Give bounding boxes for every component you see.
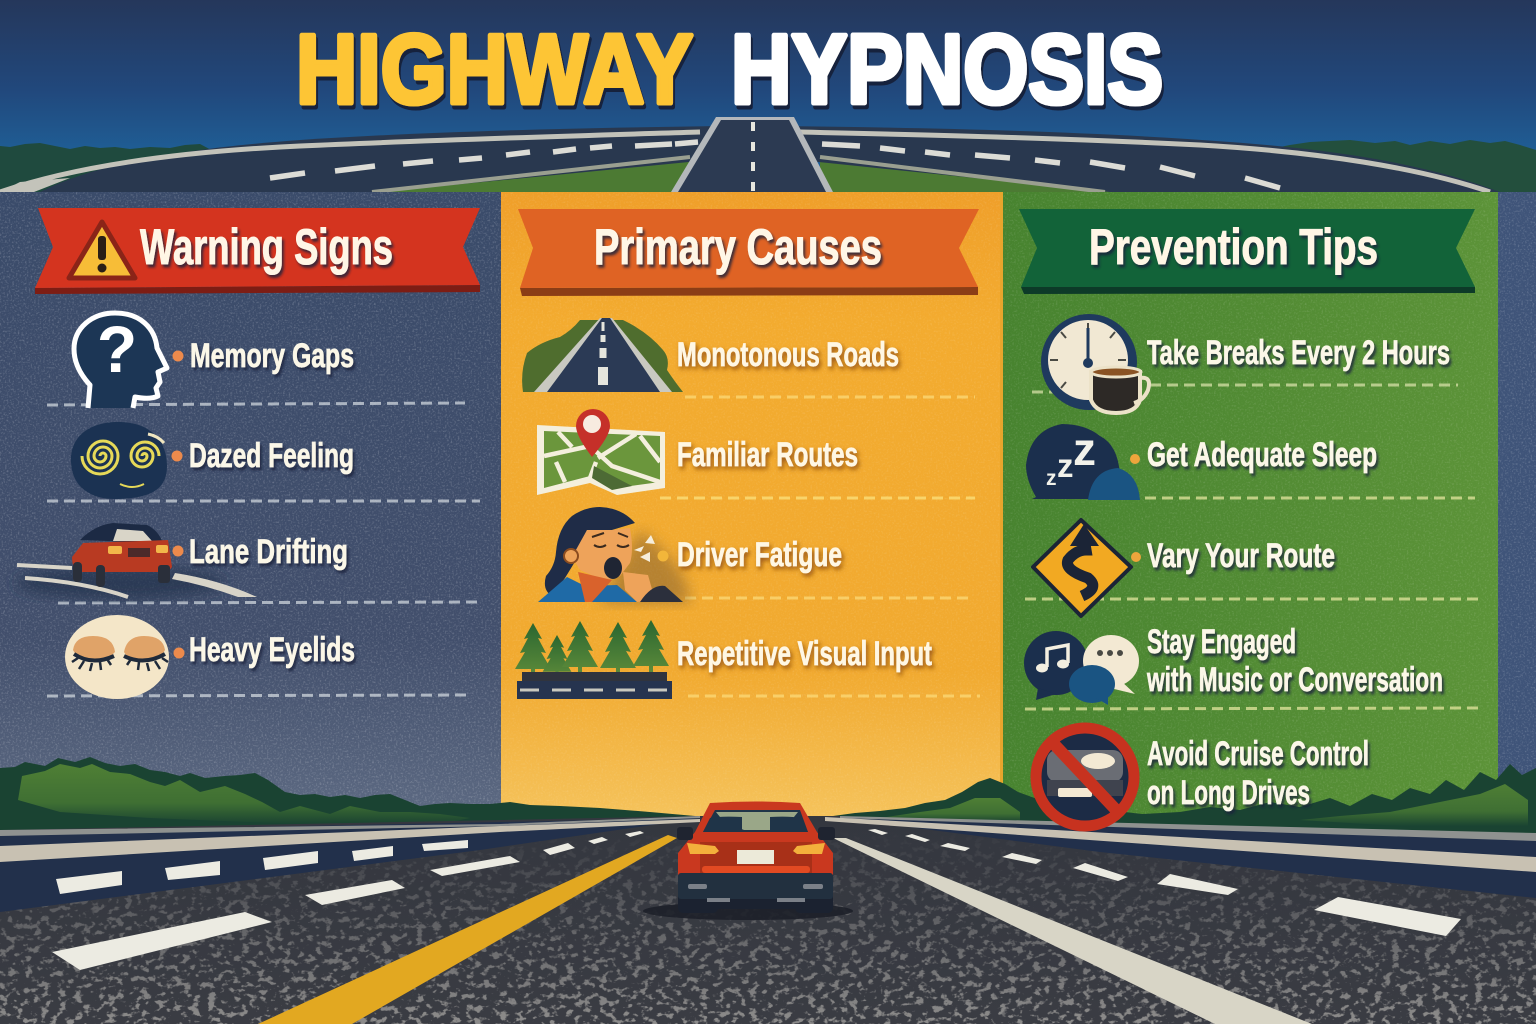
icon: sleeping zzz cloud: z	[1057, 447, 1074, 484]
item: vary your route	[1033, 520, 1335, 616]
icon: closed eyes	[65, 615, 169, 699]
panel: primary causes	[501, 192, 1001, 832]
item: heavy eyelids: Heavy Eyelids	[189, 631, 355, 669]
item: avoid cruise control	[1036, 728, 1369, 826]
icon: head with question mark: ?	[97, 312, 137, 386]
tree line left	[0, 757, 695, 835]
icon: straight road	[522, 318, 683, 392]
item: lane drifting	[15, 523, 348, 599]
icon: sleeping zzz cloud: z	[1046, 467, 1056, 490]
item: vary your route: Vary Your Route	[1147, 537, 1335, 575]
item: dazed feeling: Dazed Feeling	[189, 437, 354, 475]
icon: sleeping zzz cloud: z	[1073, 423, 1096, 475]
panel: prevention tips	[1000, 192, 1498, 832]
item: repetitive visual input: Repetitive Visual Input	[677, 635, 932, 673]
icon: clock and coffee	[1041, 314, 1149, 413]
bottom highway	[0, 816, 1536, 1024]
car	[643, 802, 853, 920]
heading: primary causes banner: Primary Causes	[594, 219, 882, 275]
title	[296, 14, 1163, 124]
icon: winding road sign	[1033, 520, 1131, 616]
item: memory gaps	[74, 312, 354, 408]
item: familiar routes: Familiar Routes	[677, 436, 858, 474]
panel: warning signs	[0, 192, 1536, 832]
icon: drifting car	[15, 523, 257, 599]
item: lane drifting: Lane Drifting	[189, 533, 348, 571]
item: driver fatigue	[538, 507, 842, 603]
item: avoid cruise control: Avoid Cruise Control	[1147, 735, 1369, 773]
item: take breaks	[1041, 314, 1450, 413]
icon: yawning driver	[538, 507, 690, 603]
heading: prevention tips banner: Prevention Tips	[1089, 219, 1378, 275]
icon: head with question mark	[74, 312, 167, 408]
icon: warning triangle	[69, 222, 135, 278]
item: stay engaged	[1024, 623, 1443, 705]
title: HYPNOSIS	[731, 14, 1163, 124]
item: adequate sleep: Get Adequate Sleep	[1147, 436, 1377, 474]
item: familiar routes	[537, 409, 858, 495]
item: monotonous roads: Monotonous Roads	[677, 336, 899, 374]
heading: warning signs banner	[35, 208, 480, 294]
item: adequate sleep	[1026, 423, 1377, 500]
icon: sleeping zzz cloud	[1026, 423, 1140, 500]
tree line right	[833, 764, 1536, 842]
item: avoid cruise control: on Long Drives	[1147, 774, 1310, 812]
icon: music and chat bubbles	[1024, 631, 1139, 705]
item: driver fatigue: Driver Fatigue	[677, 536, 842, 574]
item: repetitive visual input	[515, 620, 932, 699]
top highway scene	[0, 117, 1536, 192]
background sky	[0, 0, 1536, 200]
item: monotonous roads	[522, 318, 899, 392]
item: memory gaps: Memory Gaps	[190, 337, 354, 375]
item: dazed feeling	[71, 422, 354, 499]
icon: dazed face	[71, 422, 167, 499]
title: HIGHWAY	[296, 14, 693, 124]
heading: warning signs banner: Warning Signs	[140, 219, 393, 275]
heading: primary causes banner	[518, 209, 979, 296]
heading: prevention tips banner	[1019, 209, 1475, 294]
item: heavy eyelids	[65, 615, 355, 699]
item: stay engaged: Stay Engaged	[1147, 623, 1296, 661]
icon: map with pin	[537, 409, 665, 495]
icon: trees and road	[515, 620, 672, 699]
icon: no cruise control sign	[1036, 728, 1134, 826]
